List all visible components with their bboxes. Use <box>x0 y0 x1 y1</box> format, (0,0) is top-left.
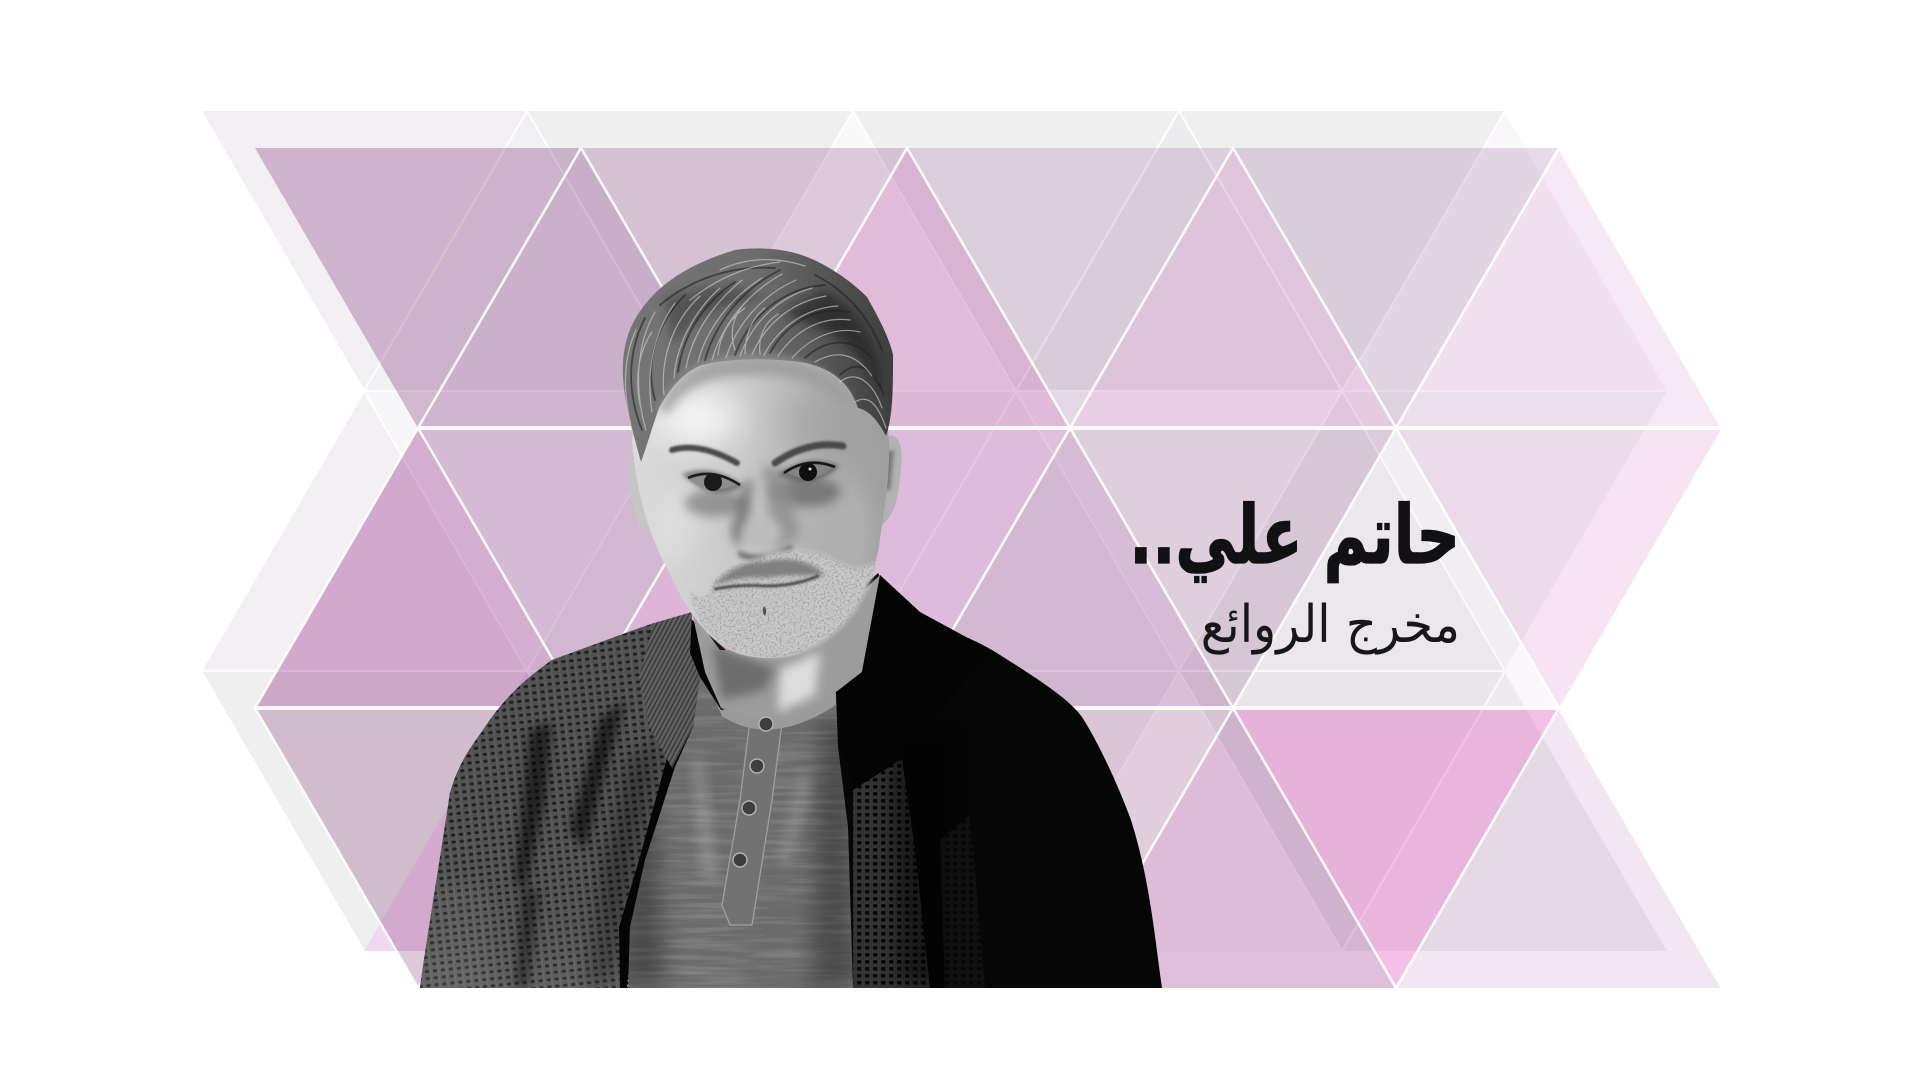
shirt buttons <box>733 717 773 867</box>
eyes <box>682 461 840 493</box>
soft hairline transition <box>657 354 854 412</box>
beard <box>690 550 877 657</box>
jacket <box>420 573 1162 988</box>
right jacket collar <box>836 575 990 790</box>
forehead highlight <box>655 390 739 446</box>
light hair strands <box>625 260 886 445</box>
zipper <box>628 680 701 988</box>
dark hair strands <box>631 268 884 430</box>
person portrait <box>420 248 1162 990</box>
hair <box>623 248 893 462</box>
subtitle: مخرج الروائع <box>1201 594 1460 655</box>
nose <box>730 480 753 548</box>
panel: rear triangle layer <box>201 111 1668 951</box>
panel: front triangle layer <box>255 148 1722 988</box>
shirt <box>628 677 853 988</box>
title: حاتم علي.. <box>1129 488 1460 583</box>
infographic canvas <box>202 111 1721 988</box>
face <box>632 330 889 658</box>
eye shadows <box>685 489 745 517</box>
henley placket <box>722 728 782 926</box>
neck <box>692 575 880 716</box>
ears <box>630 436 902 530</box>
left ribbed collar <box>639 612 700 768</box>
panel: white triangle grid lines <box>255 148 1722 988</box>
eyebrows <box>672 445 843 463</box>
shirt neckband <box>715 690 836 730</box>
